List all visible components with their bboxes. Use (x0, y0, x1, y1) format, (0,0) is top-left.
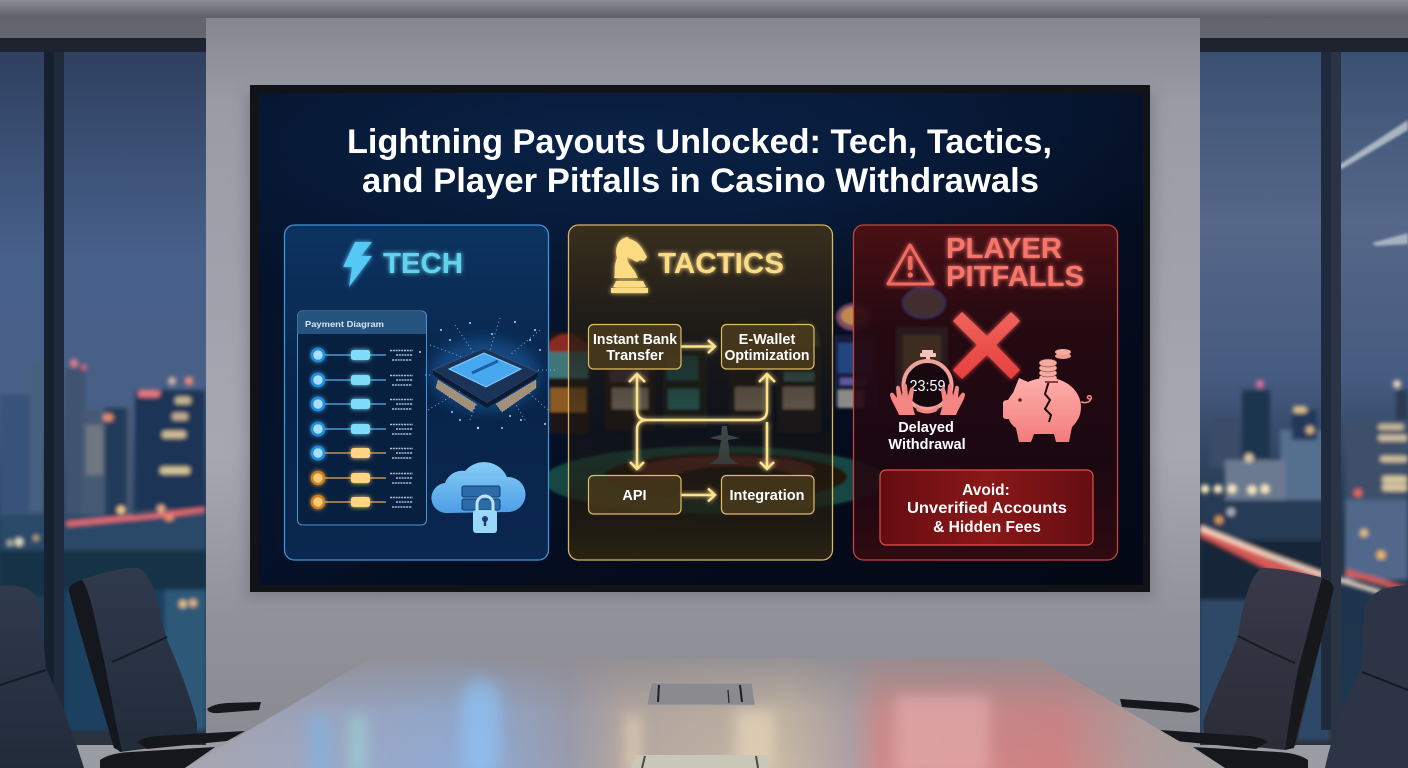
roulette table (543, 446, 887, 514)
title: and Player Pitfalls in Casino Withdrawals (362, 162, 1039, 200)
icon: stopwatch with hands (890, 350, 965, 415)
wall (206, 18, 1200, 738)
table vent: near (631, 755, 771, 768)
flow node: integration: Integration (730, 488, 804, 504)
wall display screen (250, 85, 1150, 592)
pitfalls slot machine (896, 288, 948, 412)
panel: tactics (568, 225, 832, 560)
heading: player pitfalls (946, 233, 1084, 293)
conference chairs right (1120, 568, 1408, 768)
flow node: integration (722, 476, 814, 514)
icon: broken piggy bank (1003, 349, 1091, 442)
flow arrows (629, 340, 775, 502)
callout: avoid: & Hidden Fees (933, 519, 1041, 536)
label: delayed withdrawal: Withdrawal (888, 437, 966, 453)
flow node: api: API (622, 488, 647, 504)
icon: processor chip (419, 318, 555, 429)
flow node: instant bank transfer: Instant Bank (593, 332, 678, 348)
icon: lightning bolt (343, 242, 372, 287)
icon: warning triangle (888, 245, 933, 284)
heading: tactics: TACTICS (658, 248, 784, 280)
casino backdrop: slot machines behind pitfalls (834, 303, 878, 408)
diagram heading: Payment Diagram (305, 319, 384, 329)
callout: avoid: Unverified Accounts (907, 500, 1067, 517)
conference table (185, 658, 1225, 768)
panel: player pitfalls (854, 225, 1118, 560)
label: delayed withdrawal: Delayed (898, 420, 954, 436)
callout: avoid (880, 470, 1093, 545)
wall shadow around screen (246, 92, 1154, 598)
right window with city view (1200, 38, 1408, 745)
label: delayed withdrawal (888, 420, 966, 453)
icon: chess knight (611, 237, 648, 293)
casino backdrop: slot machines and roulette table (542, 320, 887, 514)
flow node: instant bank transfer (588, 324, 681, 369)
payment diagram card (298, 311, 426, 525)
timer digits: 23:59 (910, 378, 946, 395)
table vent: far (647, 683, 755, 705)
heading: player pitfalls: PITFALLS (946, 261, 1084, 293)
flow node: e-wallet optimization: Optimization (724, 348, 810, 364)
title (347, 123, 1052, 200)
diagram rows (312, 349, 413, 508)
flow node: api (588, 476, 681, 514)
left window with city view (0, 38, 206, 745)
flow node: instant bank transfer: Transfer (606, 348, 664, 364)
title: Lightning Payouts Unlocked: Tech, Tactics, (347, 123, 1052, 161)
conference chairs left (0, 568, 261, 768)
flow node: e-wallet optimization (722, 324, 814, 369)
icon: red cross (953, 312, 1020, 379)
callout: avoid: Avoid: (962, 482, 1010, 499)
heading: player pitfalls: PLAYER (946, 233, 1062, 265)
flow node: e-wallet optimization: E-Wallet (739, 332, 795, 348)
icon: cloud with lock (431, 462, 526, 533)
heading: tech: TECH (383, 248, 463, 280)
panel: tech (284, 225, 555, 560)
window frame top bar (0, 38, 1408, 52)
